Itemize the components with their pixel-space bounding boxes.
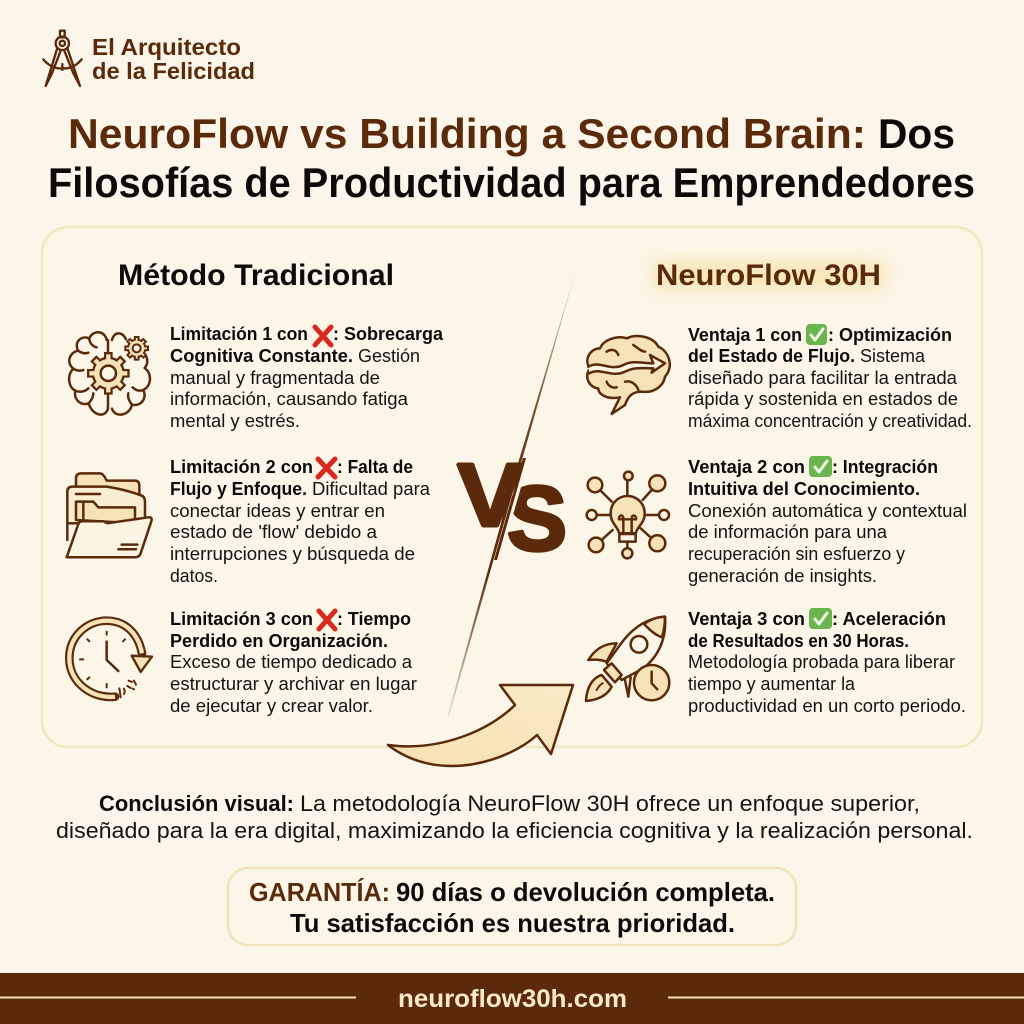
item: ventaja 2 [587,456,967,586]
conclusion text: diseñado para la era digital, maximizando la eficiencia cognitiva y la realización personal. [56,818,973,843]
arrow: curved upward [388,685,573,766]
logo text: de la Felicidad [92,58,255,84]
text block: ventaja 2: : Integración [832,457,938,477]
icon: brain with gears [69,332,150,415]
icon: drafting compass [43,31,82,86]
text block: ventaja 1: diseñado para facilitar la entrada [688,368,958,388]
footer bar [0,973,1024,1024]
text block: ventaja 1: : Optimización [828,325,952,345]
icon: folders [67,473,152,557]
text block: ventaja 3: productividad en un corto periodo. [688,696,966,716]
icon: lightbulb network [587,472,669,558]
panel: comparison [42,227,982,747]
text block: ventaja 2: generación de insights. [688,566,877,586]
conclusion text: La metodología NeuroFlow 30H ofrece un enfoque superior, [300,791,920,816]
text block: ventaja 2 [688,456,967,586]
text block: limitación 1: : Sobrecarga [333,324,444,344]
text block: ventaja 1: rápida y sostenida en estados de [688,389,958,409]
logo: El Arquitecto de la Felicidad [43,31,255,86]
text block: limitación 3: Perdido en Organización. [170,631,388,651]
guarantee box: Tu satisfacción es nuestra prioridad. [290,908,735,938]
text block: ventaja 1 [688,324,972,431]
VS mark: S [507,468,567,570]
text block: limitación 1: Gestión [358,346,420,366]
item: limitación 3 [69,609,417,716]
text block: ventaja 3 [688,608,966,716]
text block: ventaja 3: Ventaja 3 con [688,609,805,629]
text block: ventaja 3: de Resultados en 30 Horas. [688,631,909,651]
text block: ventaja 2: Intuitiva del Conocimiento. [688,479,920,499]
text block: limitación 1: Limitación 1 con [170,324,308,344]
text block: limitación 1 [170,324,444,431]
title: NeuroFlow vs Building a Second Brain: [68,110,866,157]
text block: limitación 3: Exceso de tiempo dedicado a [170,652,413,672]
text block: ventaja 1: del Estado de Flujo. [688,346,855,366]
text block: ventaja 2: recuperación sin esfuerzo y [688,544,905,564]
guarantee box: 90 días o devolución completa. [396,877,775,907]
text block: limitación 3 [170,609,417,716]
text block: ventaja 2: de información para una [688,522,888,542]
item: ventaja 3 [586,608,966,716]
text block: limitación 2 [170,457,431,586]
text block: limitación 1: mental y estrés. [170,411,300,431]
text block: limitación 1: Cognitiva Constante. [170,346,353,366]
text block: ventaja 3: : Aceleración [832,609,946,629]
text block: limitación 2: conectar ideas y entrar en [170,501,385,521]
title: Dos [878,110,955,157]
item: ventaja 1 [587,324,972,431]
text block: ventaja 1: Sistema [860,346,926,366]
item: limitación 2 [67,457,431,586]
heading: Método Tradicional: Método Tradicional [118,259,394,292]
conclusion text: Conclusión visual: [99,791,294,816]
icon: brain with flow arrow [587,336,670,414]
heading: NeuroFlow 30H: NeuroFlow 30H [656,259,881,292]
text block: limitación 2: interrupciones y búsqueda de [170,544,415,564]
text block: ventaja 3: tiempo y aumentar la [688,674,856,694]
logo text [92,34,255,84]
text block: limitación 1: información, causando fatiga [170,389,409,409]
divider line [448,265,578,716]
title: Filosofías de Productividad para Emprendedores [48,159,975,206]
text block: limitación 2: : Falta de [337,457,413,477]
text block: limitación 2: datos. [170,566,218,586]
text block: limitación 3: Limitación 3 con [170,609,313,629]
item: limitación 1 [69,324,444,431]
logo text: El Arquitecto [92,34,241,60]
text block: limitación 2: Dificultad para [312,479,431,499]
footer bar: neuroflow30h.com [398,985,627,1013]
text block: limitación 3: de ejecutar y crear valor. [170,696,373,716]
text block: limitación 2: estado de 'flow' debido a [170,522,378,542]
text block: ventaja 2: Ventaja 2 con [688,457,805,477]
guarantee box: GARANTÍA: [249,877,390,907]
icon: clock with arrow [69,621,152,697]
text block: ventaja 1: máxima concentración y creatividad. [688,411,972,431]
guarantee box [228,868,796,945]
text block: ventaja 2: Conexión automática y contextual [688,501,967,521]
text block: limitación 2: Flujo y Enfoque. [170,479,307,499]
text block: ventaja 1: Ventaja 1 con [688,325,802,345]
title [48,110,975,206]
text block: limitación 2: Limitación 2 con [170,457,313,477]
conclusion text [56,791,973,843]
text block: ventaja 3: Metodología probada para liberar [688,652,955,672]
text block: limitación 3: : Tiempo [337,609,411,629]
VS mark: V [457,446,523,546]
VS mark [457,446,567,570]
text block: limitación 1: manual y fragmentada de [170,368,380,388]
text block: limitación 3: estructurar y archivar en lugar [170,674,417,694]
icon: rocket with clock [586,617,669,701]
